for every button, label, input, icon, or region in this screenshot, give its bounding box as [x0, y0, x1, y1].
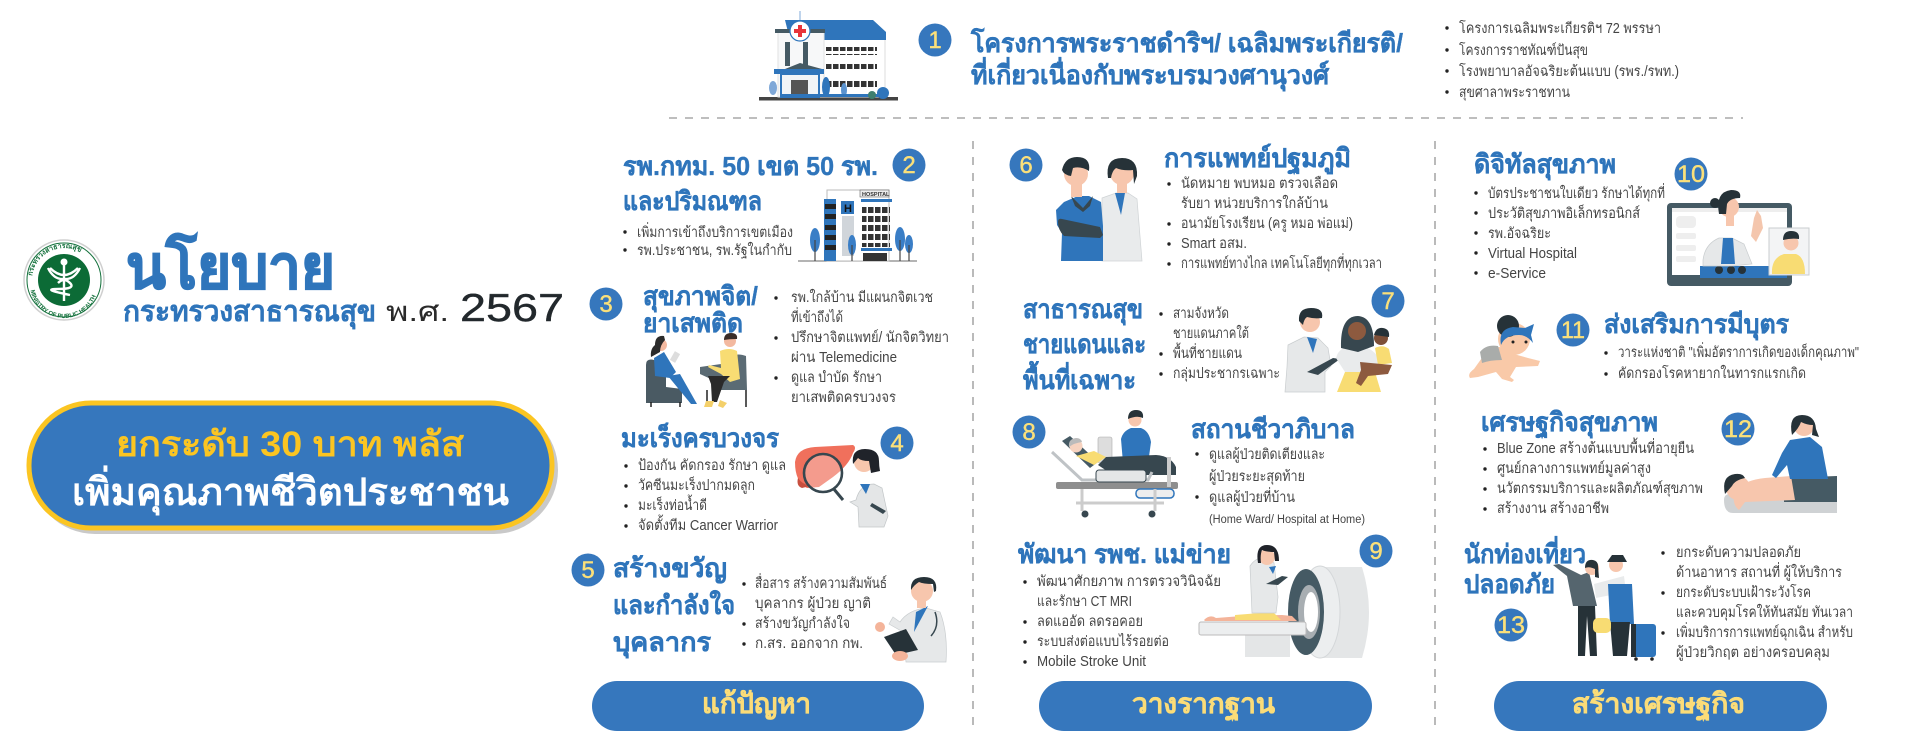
- list: royal projects: สุขศาลาพระราชทาน: [1459, 85, 1570, 101]
- item 13: safe tourism: ยกระดับความปลอดภัย: [1676, 545, 1801, 561]
- heading: royal projects: ที่เกี่ยวเนื่องกับพระบรมวงศานุวงศ์: [971, 56, 1329, 92]
- heading: policy: นโยบาย: [126, 232, 335, 301]
- item 2: Bangkok 50 districts: เพิ่มการเข้าถึงบริการเขตเมือง: [637, 222, 793, 241]
- label pill: solve problems: แก้ปัญหา: [702, 688, 811, 720]
- item 10: digital health: 10: [1677, 161, 1705, 188]
- item 3: mental health and drugs: สุขภาพจิต/: [643, 281, 758, 313]
- item 3: mental health and drugs: ยาเสพติดครบวงจร: [791, 390, 896, 406]
- item 9: hospital network: [1018, 534, 1392, 670]
- icon: doctor with mother and baby: [1285, 308, 1392, 392]
- item 8: palliative care: สถานชีวาภิบาล: [1191, 414, 1355, 444]
- label pill: build foundations: วางรากฐาน: [1132, 688, 1275, 722]
- item 13: safe tourism: ผู้ป่วยวิกฤต อย่างครอบคลุม: [1676, 644, 1830, 661]
- item 12: health economy: Blue Zone สร้างต้นแบบพื้นที่อายุยืน: [1497, 437, 1694, 457]
- item 6: primary care: รับยา หน่วยบริการใกล้บ้าน: [1181, 194, 1328, 212]
- item 9: hospital network: และรักษา CT MRI: [1037, 594, 1132, 610]
- item 8: palliative care: ผู้ป่วยระยะสุดท้าย: [1209, 468, 1305, 485]
- icon: counselling session: [646, 333, 747, 408]
- item 5: staff morale: [572, 553, 946, 662]
- icon: telemedicine video call on screen: [1667, 190, 1809, 286]
- icon: crawling baby: [1469, 315, 1540, 382]
- panel: create economy column: [1464, 149, 1859, 731]
- icon: two medical staff: [1056, 157, 1142, 261]
- item 10: digital health: ประวัติสุขภาพอิเล็กทรอนิกส์: [1488, 203, 1640, 222]
- icon: massage therapy: [1724, 415, 1837, 513]
- icon: tourists with map and luggage: [1553, 555, 1656, 661]
- icon: ministry of public health seal: กระทรวงสาธารณสุข: [28, 244, 82, 276]
- item 10: digital health: รพ.อัจฉริยะ: [1488, 226, 1551, 242]
- item 11: fertility: คัดกรองโรคหายากในทารกแรกเกิด: [1618, 364, 1806, 382]
- item 5: staff morale: บุคลากร ผู้ป่วย ญาติ: [755, 595, 871, 612]
- item 7: border public health: ชายแดนภาคใต้: [1173, 324, 1249, 342]
- list: royal projects: โครงการราชทัณฑ์ปันสุข: [1459, 41, 1588, 59]
- item 13: safe tourism: ด้านอาหาร สถานที่ ผู้ให้บริการ: [1676, 562, 1842, 581]
- item 13: safe tourism: นักท่องเที่ยว: [1464, 535, 1586, 569]
- subheading: ministry and year: กระทรวงสาธารณสุข: [123, 296, 376, 329]
- icon: hospital tower: [798, 190, 917, 261]
- item 5: staff morale: สื่อสาร สร้างความสัมพันธ์: [755, 573, 887, 592]
- item 8: palliative care: (Home Ward/ Hospital at Home): [1209, 514, 1365, 526]
- item 6: primary care: การแพทย์ทางไกล เทคโนโลยีทุกที่ทุกเวลา: [1181, 253, 1382, 272]
- panel: build foundations column: [1010, 143, 1404, 731]
- item 4: cancer care: จัดตั้งทีม Cancer Warrior: [638, 514, 778, 534]
- item 2: Bangkok 50 districts: และปริมณฑล: [623, 186, 762, 216]
- item 3: mental health and drugs: ดูแล บำบัด รักษา: [791, 370, 882, 386]
- badge: 7: [1372, 284, 1404, 318]
- icon: doctor with clipboard: [875, 577, 946, 662]
- list: royal projects: โรงพยาบาลอัจฉริยะต้นแบบ (รพร./รพท.): [1459, 62, 1679, 80]
- item 7: border public health: พื้นที่เฉพาะ: [1023, 360, 1136, 395]
- item 5: staff morale: สร้างขวัญกำลังใจ: [755, 614, 850, 632]
- icon: patient in hospital bed with nurse: [1052, 410, 1178, 518]
- item 8: palliative care: [1012, 410, 1365, 526]
- item 12: health economy: ศูนย์กลางการแพทย์มูลค่าสูง: [1497, 460, 1651, 477]
- panel: item 1 royal projects: [759, 11, 1679, 101]
- heading: royal projects: โครงการพระราชดำริฯ/ เฉลิมพระเกียรติ/: [970, 27, 1403, 58]
- item 13: safe tourism: และควบคุมโรคให้ทันสมัย ทันเวลา: [1676, 603, 1853, 621]
- item 3: mental health and drugs: 3: [599, 291, 613, 318]
- item 9: hospital network: ลดแออัด ลดรอคอย: [1037, 614, 1143, 630]
- list: royal projects: [1445, 19, 1679, 101]
- badge: 9: [1360, 534, 1392, 568]
- item 7: border public health: ชายแดนและ: [1023, 329, 1146, 359]
- callout: 30 baht plus slogan: ยกระดับ 30 บาท พลัส: [116, 425, 465, 464]
- item 6: primary care: การแพทย์ปฐมภูมิ: [1164, 143, 1351, 176]
- icon: doctor inspecting liver: [795, 445, 888, 527]
- item 4: cancer care: [621, 422, 914, 534]
- item 5: staff morale: สร้างขวัญ: [613, 553, 727, 584]
- subheading: ministry and year: 2567: [460, 287, 564, 330]
- item 12: health economy: สร้างงาน สร้างอาชีพ: [1497, 500, 1609, 517]
- item 9: hospital network: พัฒนา รพช. แม่ข่าย: [1018, 539, 1231, 569]
- item 13: safe tourism: ปลอดภัย: [1464, 569, 1555, 599]
- item 8: palliative care: ดูแลผู้ป่วยที่บ้าน: [1209, 487, 1295, 506]
- item 3: mental health and drugs: ผ่าน Telemedicine: [791, 350, 897, 366]
- item 5: staff morale: ก.สร. ออกจาก กพ.: [755, 636, 863, 652]
- badge: 7: 7: [1381, 288, 1395, 315]
- item 11: fertility: วาระแห่งชาติ "เพิ่มอัตราการเกิดของเด็กคุณภาพ": [1618, 342, 1859, 361]
- item 13: safe tourism: เพิ่มบริการการแพทย์ฉุกเฉิน สำหรับ: [1676, 622, 1853, 641]
- item 4: cancer care: ป้องกัน คัดกรอง รักษา ดูแล: [638, 457, 786, 474]
- icon: MRI scanner with patient and doctor: [1199, 545, 1369, 658]
- item 6: primary care: นัดหมาย พบหมอ ตรวจเลือด: [1181, 175, 1338, 192]
- label pill: solve problems: [592, 681, 924, 731]
- item 2: Bangkok 50 districts: 2: [902, 152, 916, 179]
- item 13: safe tourism: 13: [1497, 612, 1525, 639]
- item 3: mental health and drugs: [590, 281, 949, 408]
- item 11: fertility: 11: [1561, 317, 1585, 344]
- panel: left header and slogan: [23, 231, 564, 534]
- item 9: hospital network: Mobile Stroke Unit: [1037, 654, 1146, 670]
- badge: 1: 1: [928, 27, 942, 54]
- item 11: fertility: ส่งเสริมการมีบุตร: [1604, 309, 1789, 341]
- item 12: health economy: [1481, 407, 1837, 517]
- item 3: mental health and drugs: ที่เข้าถึงได้: [791, 307, 843, 326]
- item 2: Bangkok 50 districts: รพ.กทม. 50 เขต 50 รพ.: [623, 151, 878, 181]
- item 12: health economy: 12: [1724, 416, 1752, 443]
- item 8: palliative care: ดูแลผู้ป่วยติดเตียงและ: [1209, 446, 1325, 463]
- item 10: digital health: e-Service: [1488, 266, 1546, 282]
- icon: ministry of public health seal: MINISTRY OF PUBLIC HEALTH: [30, 290, 96, 318]
- item 6: primary care: 6: [1019, 152, 1033, 179]
- item 6: primary care: อนามัยโรงเรียน (ครู หมอ พ่อแม่): [1181, 214, 1353, 232]
- item 10: digital health: [1474, 149, 1809, 286]
- item 9: hospital network: พัฒนาศักยภาพ การตรวจวินิจฉัย: [1037, 574, 1221, 590]
- item 3: mental health and drugs: ยาเสพติด: [643, 308, 743, 338]
- item 7: border public health: พื้นที่ชายแดน: [1173, 342, 1242, 362]
- item 3: mental health and drugs: รพ.ใกล้บ้าน มีแผนกจิตเวช: [791, 288, 933, 306]
- item 7: border public health: [1023, 284, 1404, 395]
- item 12: health economy: เศรษฐกิจสุขภาพ: [1481, 407, 1658, 440]
- icon: ministry of public health seal: [23, 239, 105, 321]
- item 4: cancer care: มะเร็งท่อน้ำดี: [638, 494, 707, 514]
- item 9: hospital network: ระบบส่งต่อแบบไร้รอยต่อ: [1037, 632, 1169, 650]
- item 5: staff morale: บุคลากร: [613, 627, 711, 659]
- subheading: ministry and year: [123, 287, 564, 330]
- label pill: build foundations: [1039, 681, 1372, 731]
- callout: 30 baht plus slogan: [29, 403, 558, 534]
- item 10: digital health: Virtual Hospital: [1488, 246, 1577, 262]
- item 7: border public health: สามจังหวัด: [1173, 306, 1229, 322]
- icon: hospital tower: HOSPITAL: [862, 192, 890, 198]
- label pill: create economy: [1494, 681, 1827, 731]
- badge: 1: [918, 24, 952, 56]
- heading: royal projects: [970, 27, 1403, 92]
- item 7: border public health: กลุ่มประชากรเฉพาะ: [1173, 366, 1280, 382]
- item 4: cancer care: วัคซีนมะเร็งปากมดลูก: [638, 475, 755, 494]
- item 10: digital health: บัตรประชาชนใบเดียว รักษาได้ทุกที่: [1488, 183, 1665, 202]
- item 5: staff morale: 5: [581, 557, 595, 584]
- item 11: fertility: [1469, 309, 1859, 382]
- list: royal projects: โครงการเฉลิมพระเกียรติฯ 72 พรรษา: [1459, 19, 1661, 37]
- item 7: border public health: สาธารณสุข: [1023, 294, 1143, 326]
- panel: solve problems column: [572, 148, 949, 731]
- item 13: safe tourism: [1464, 535, 1853, 661]
- icon: hospital building with red cross: [759, 11, 898, 100]
- callout: 30 baht plus slogan: เพิ่มคุณภาพชีวิตประชาชน: [72, 465, 509, 516]
- item 6: primary care: [1010, 143, 1382, 272]
- item 12: health economy: นวัตกรรมบริการและผลิตภัณฑ์สุขภาพ: [1497, 480, 1703, 497]
- item 3: mental health and drugs: ปรึกษาจิตแพทย์/ นักจิตวิทยา: [791, 329, 949, 346]
- subheading: ministry and year: พ.ศ.: [386, 296, 449, 327]
- item 8: palliative care: 8: [1022, 419, 1036, 446]
- badge: 9: 9: [1369, 538, 1383, 565]
- item 2: Bangkok 50 districts: [623, 148, 926, 261]
- item 4: cancer care: มะเร็งครบวงจร: [621, 422, 779, 453]
- item 5: staff morale: และกำลังใจ: [613, 590, 735, 620]
- item 13: safe tourism: ยกระดับระบบเฝ้าระวังโรค: [1676, 583, 1811, 601]
- item 4: cancer care: 4: [890, 430, 904, 457]
- item 2: Bangkok 50 districts: รพ.ประชาชน, รพ.รัฐในกำกับ: [637, 241, 792, 259]
- item 10: digital health: ดิจิทัลสุขภาพ: [1474, 149, 1616, 181]
- label pill: create economy: สร้างเศรษฐกิจ: [1572, 688, 1745, 722]
- icon: hospital tower: H: [844, 203, 852, 215]
- item 6: primary care: Smart อสม.: [1181, 236, 1247, 252]
